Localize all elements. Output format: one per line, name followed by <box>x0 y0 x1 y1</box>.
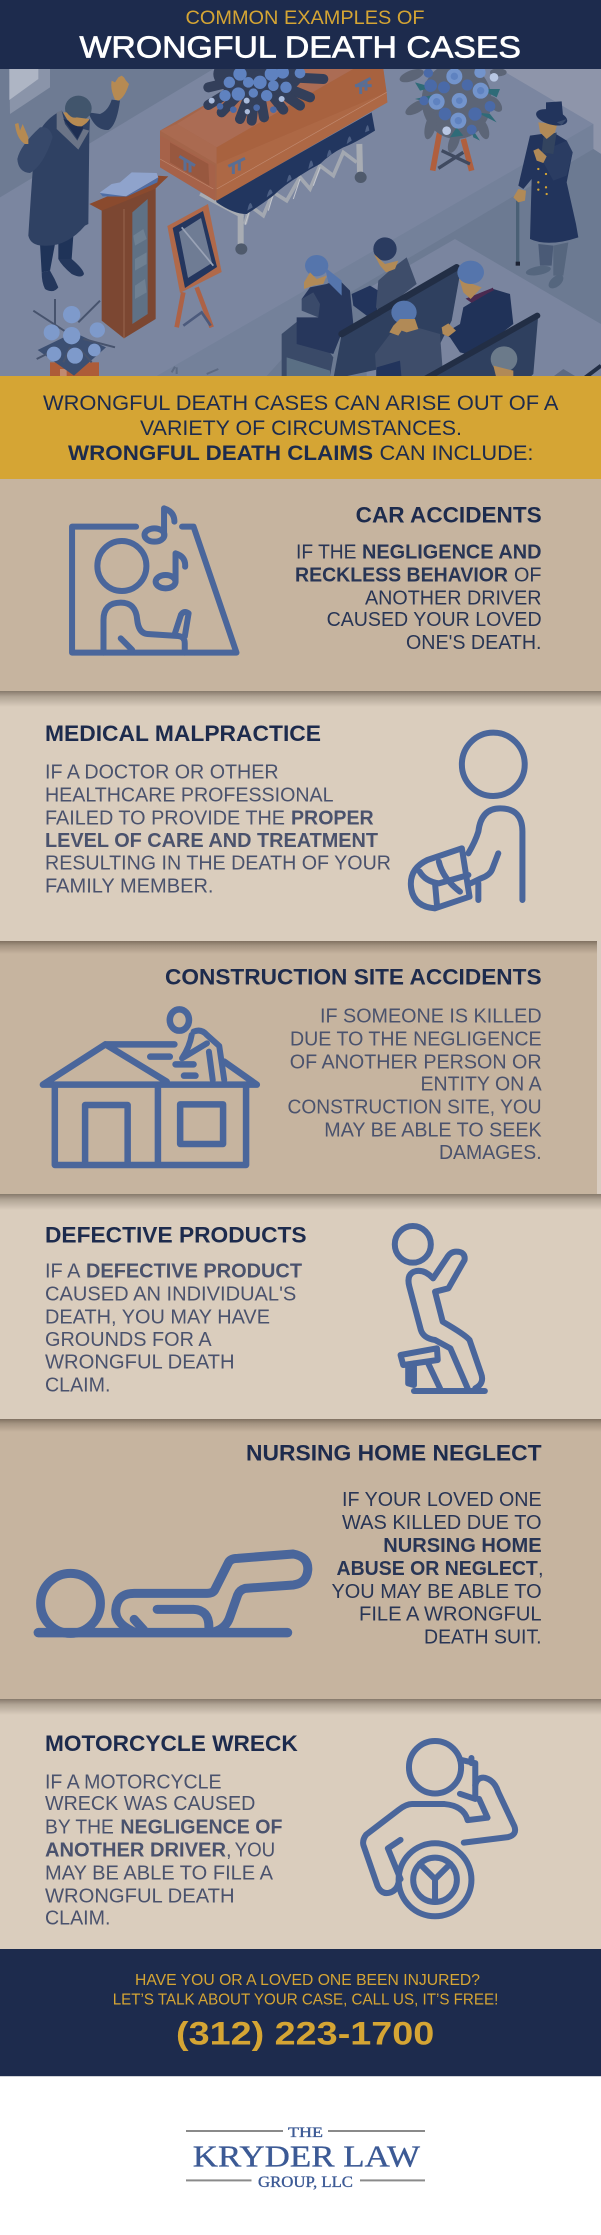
figure: mourner with raised hands <box>15 76 129 291</box>
figure: standing wreath <box>398 62 507 171</box>
intro band <box>0 376 601 479</box>
panel backgrounds <box>0 479 601 1949</box>
text block: GROUNDS FOR A <box>45 1329 212 1351</box>
figure: coffin flowers <box>203 69 328 126</box>
text block: , <box>538 1558 544 1580</box>
text block <box>45 1260 302 1396</box>
text block: PROPER <box>291 807 374 829</box>
text block: DEATH SUIT. <box>424 1626 542 1648</box>
text block: WAS KILLED DUE TO <box>342 1512 542 1534</box>
text block: ONE'S DEATH. <box>406 632 542 654</box>
text block: HEALTHCARE PROFESSIONAL <box>45 784 334 806</box>
heading: MOTORCYCLE WRECK <box>45 1731 298 1756</box>
heading: CAR ACCIDENTS <box>356 503 542 528</box>
text block: CLAIM. <box>45 1908 110 1930</box>
text block: CAUSED AN INDIVIDUAL'S <box>45 1283 296 1305</box>
icon: person falling from stool <box>395 1226 485 1391</box>
panel: nursing home neglect <box>38 1441 544 1648</box>
figure: flower pedestal <box>33 299 218 376</box>
text block: IF A DOCTOR OR OTHER <box>45 761 279 783</box>
text block: BY THE <box>45 1816 114 1838</box>
text block: DEATH, YOU MAY HAVE <box>45 1306 270 1328</box>
text block <box>295 541 542 654</box>
text block: MAY BE ABLE TO SEEK <box>324 1119 542 1141</box>
text block: IF A MOTORCYCLE <box>45 1771 222 1793</box>
text block: OF <box>514 564 542 586</box>
text block: IF YOUR LOVED ONE <box>342 1489 542 1511</box>
panel: car accidents <box>72 503 542 654</box>
text block: FILE A WRONGFUL <box>359 1603 542 1625</box>
text block: DAMAGES. <box>439 1142 542 1164</box>
call to action band <box>0 1949 601 2077</box>
text block: ANOTHER DRIVER <box>365 587 542 609</box>
panel: medical malpractice <box>45 721 525 908</box>
intro band: WRONGFUL DEATH CASES CAN ARISE OUT OF A <box>43 392 558 415</box>
panel: defective products <box>45 1223 485 1396</box>
text block: MAY BE ABLE TO FILE A <box>45 1862 274 1884</box>
footer logo: THE <box>288 2125 323 2141</box>
title: WRONGFUL DEATH CASES <box>80 30 521 64</box>
text block: YOU <box>235 1840 275 1862</box>
text block: WRONGFUL DEATH <box>45 1351 235 1373</box>
text block: LEVEL OF CARE AND TREATMENT <box>45 830 378 852</box>
text block: FAILED TO PROVIDE THE <box>45 807 285 829</box>
footer logo: GROUP, LLC <box>258 2174 353 2191</box>
text block: YOU MAY BE ABLE TO <box>332 1581 542 1603</box>
intro band: CAN INCLUDE: <box>380 442 534 465</box>
heading: CONSTRUCTION SITE ACCIDENTS <box>165 964 542 989</box>
text block: ANOTHER DRIVER <box>45 1840 227 1862</box>
text block: DEFECTIVE PRODUCT <box>86 1260 302 1282</box>
icon: driver with music notes <box>72 508 236 653</box>
text block: CAUSED YOUR LOVED <box>327 609 542 631</box>
subtitle: COMMON EXAMPLES OF <box>186 7 425 29</box>
text block: FAMILY MEMBER. <box>45 875 213 897</box>
text block: CONSTRUCTION SITE, YOU <box>288 1096 542 1118</box>
text block <box>45 761 391 897</box>
text block: NURSING HOME <box>383 1535 542 1557</box>
icon: rider with phone and handlebar <box>363 1741 515 1916</box>
figure: gentleman with top hat and cane <box>513 101 578 291</box>
text block: , <box>226 1840 232 1862</box>
text block: NEGLIGENCE AND <box>362 541 542 563</box>
text block: DUE TO THE NEGLIGENCE <box>290 1028 542 1050</box>
icon: person with arm cast <box>411 733 525 908</box>
intro band: WRONGFUL DEATH CLAIMS <box>68 442 373 465</box>
text block: WRONGFUL DEATH <box>45 1886 235 1908</box>
panel: motorcycle wreck <box>45 1731 515 1930</box>
intro band: VARIETY OF CIRCUMSTANCES. <box>140 417 462 440</box>
text block: IF SOMEONE IS KILLED <box>320 1005 542 1027</box>
text block: RESULTING IN THE DEATH OF YOUR <box>45 852 391 874</box>
icon: person crawling on the floor <box>38 1554 308 1633</box>
text block: ABUSE OR NEGLECT <box>336 1558 538 1580</box>
heading: MEDICAL MALPRACTICE <box>45 721 321 746</box>
phone number: (312) 223-1700 <box>176 2016 434 2052</box>
heading: NURSING HOME NEGLECT <box>246 1441 542 1466</box>
call to action band: LET’S TALK ABOUT YOUR CASE, CALL US, IT’S FREE! <box>113 1991 498 2008</box>
footer logo <box>186 2125 425 2191</box>
text block <box>288 1005 542 1164</box>
text block: NEGLIGENCE OF <box>120 1816 283 1838</box>
panel: construction site accidents <box>43 964 542 1165</box>
footer logo: KRYDER LAW <box>193 2138 421 2173</box>
text block: IF THE <box>296 541 356 563</box>
text block <box>45 1771 282 1930</box>
call to action band: HAVE YOU OR A LOVED ONE BEEN INJURED? <box>135 1972 480 1989</box>
figure: lectern with book <box>89 172 168 338</box>
text block: IF A <box>45 1260 81 1282</box>
text block: ENTITY ON A <box>420 1074 542 1096</box>
icon: worker on house roof <box>43 1009 257 1165</box>
text block: OF ANOTHER PERSON OR <box>290 1051 542 1073</box>
text block <box>332 1489 544 1648</box>
figure: seated mourners on pews <box>282 237 601 379</box>
text block: RECKLESS BEHAVIOR <box>295 564 509 586</box>
header banner <box>0 0 601 69</box>
figure: coffin with skirt <box>160 69 387 255</box>
illustration: funeral scene <box>0 50 601 379</box>
text block: WRECK WAS CAUSED <box>45 1793 255 1815</box>
text block: CLAIM. <box>45 1374 110 1396</box>
heading: DEFECTIVE PRODUCTS <box>45 1223 307 1248</box>
figure: portrait on easel <box>167 204 222 327</box>
